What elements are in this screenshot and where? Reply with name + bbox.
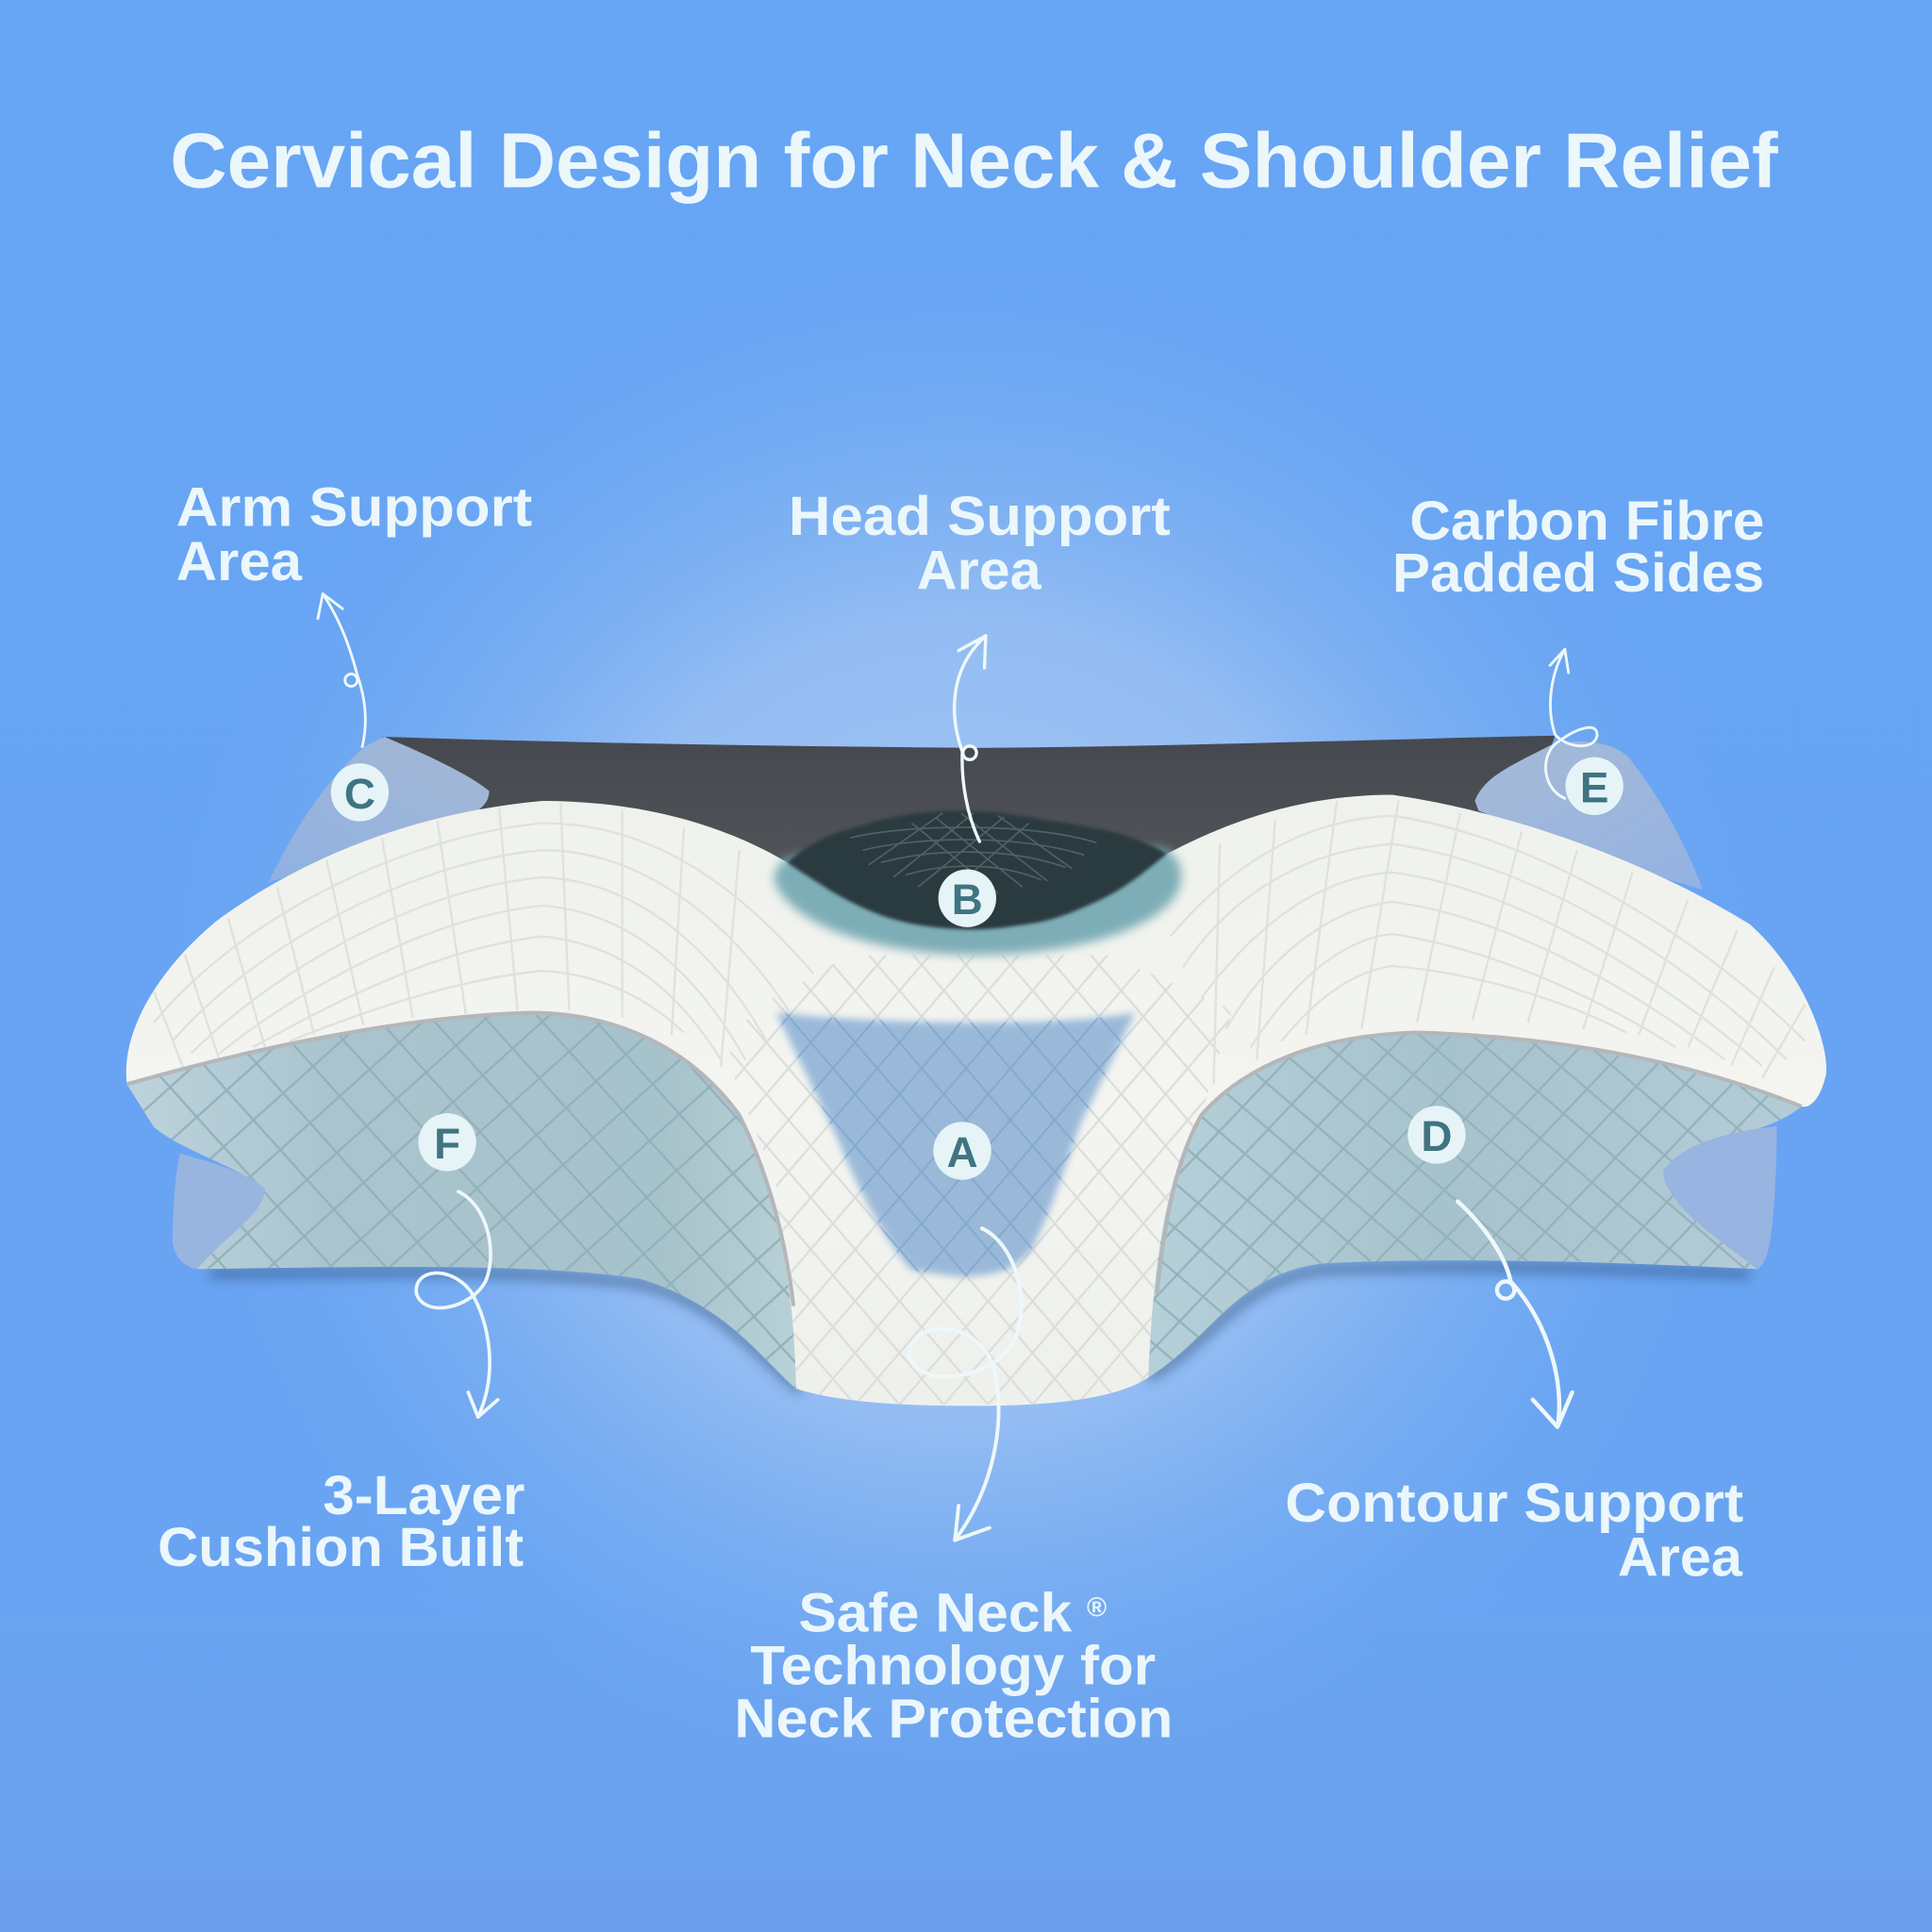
label: safe neck technology: Safe Neck xyxy=(798,1582,1073,1643)
label: 3-layer cushion built: 3-Layer xyxy=(323,1465,525,1526)
pillow ground shadow xyxy=(209,1267,1750,1390)
quilting on white top xyxy=(154,801,1805,1417)
label: safe neck technology: Technology for xyxy=(750,1635,1156,1696)
teal ring around head hollow xyxy=(774,848,1181,955)
label: carbon fibre padded sides: Padded Sides xyxy=(1392,542,1764,604)
title: Cervical Design for Neck & Shoulder Relief xyxy=(170,119,1778,205)
badge E: E xyxy=(1580,763,1608,811)
safe neck triangle zone xyxy=(776,1013,1135,1276)
badge A xyxy=(933,1122,991,1180)
teal side right xyxy=(1148,1033,1802,1377)
label: 3-layer cushion built: Cushion Built xyxy=(158,1517,524,1578)
head hollow xyxy=(788,810,1167,929)
label: 3-layer cushion built xyxy=(158,1465,525,1578)
badge A: A xyxy=(947,1128,978,1176)
badge E xyxy=(1565,758,1624,815)
label: head support area: Head Support xyxy=(789,486,1171,547)
label: safe neck technology xyxy=(734,1582,1173,1750)
badge C xyxy=(331,763,389,822)
arrow to arm support xyxy=(318,594,365,747)
teal side left quilting xyxy=(124,1010,801,1392)
label: arm support area xyxy=(176,477,532,592)
label: head support area: Area xyxy=(917,540,1042,601)
label: arm support area: Area xyxy=(176,531,303,592)
badge D xyxy=(1407,1106,1466,1164)
wing E xyxy=(1474,741,1703,890)
arrow to carbon fibre sides xyxy=(1545,649,1597,798)
teal side right quilting xyxy=(1149,1034,1781,1360)
label: safe neck technology: ® xyxy=(1087,1593,1107,1624)
white quilted top xyxy=(126,794,1826,1406)
badge B: B xyxy=(952,875,983,924)
label: contour support area: Contour Support xyxy=(1285,1473,1743,1534)
dark back band xyxy=(382,736,1555,949)
safe neck quilting xyxy=(776,1010,1140,1281)
arrow to neck protection xyxy=(909,1228,1022,1541)
label: head support area xyxy=(789,486,1171,601)
badge D: D xyxy=(1421,1112,1452,1160)
teal side left xyxy=(127,1013,796,1389)
label: arm support area: Arm Support xyxy=(176,477,532,539)
arrow to contour support xyxy=(1457,1201,1573,1426)
badge F xyxy=(418,1113,476,1171)
head hollow mesh xyxy=(850,813,1096,893)
label: contour support area: Area xyxy=(1618,1527,1743,1589)
arrow to cushion built xyxy=(416,1191,498,1417)
badge B xyxy=(939,869,996,927)
arrow to head support xyxy=(955,636,986,841)
right end lobe xyxy=(1663,1126,1776,1269)
label: contour support area xyxy=(1285,1473,1743,1589)
badge C: C xyxy=(344,770,375,818)
left end lobe xyxy=(173,1154,265,1269)
label: safe neck technology: Neck Protection xyxy=(734,1689,1173,1750)
label: carbon fibre padded sides: Carbon Fibre xyxy=(1409,491,1764,552)
wing C xyxy=(269,737,490,882)
label: carbon fibre padded sides xyxy=(1392,491,1764,604)
pillow illustration xyxy=(124,736,1826,1417)
badge F: F xyxy=(434,1120,460,1168)
rim piping xyxy=(127,1013,1802,1306)
